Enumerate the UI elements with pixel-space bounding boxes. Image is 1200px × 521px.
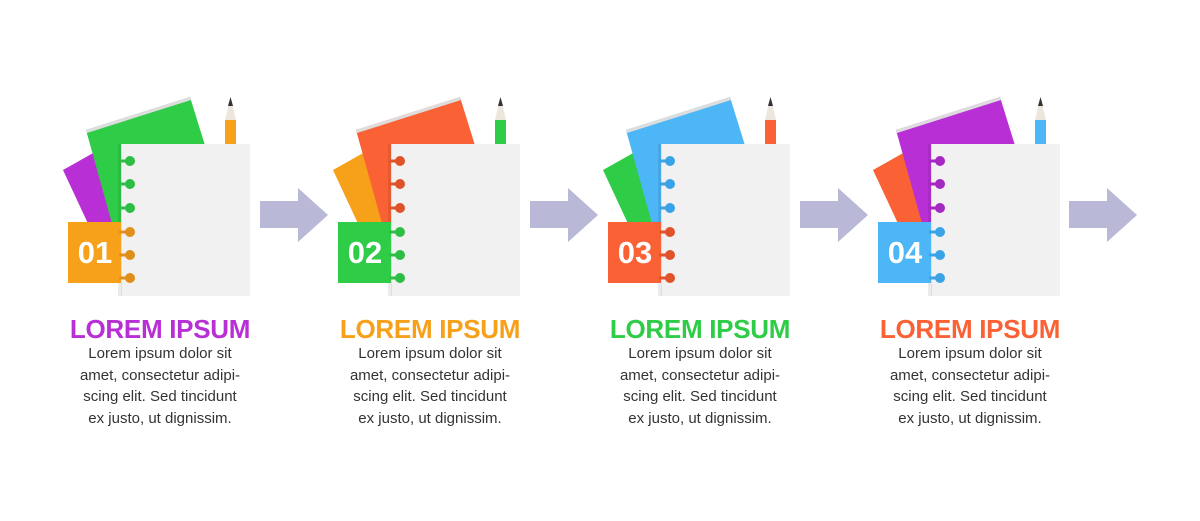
text 4: amet, consectetur adipi- [890,366,1050,384]
unit 1 illustration: 01 [78,235,112,270]
unit 2 illustration [333,97,520,296]
arrow 2 [530,188,598,242]
text 3: amet, consectetur adipi- [620,366,780,384]
text 3: scing elit. Sed tincidunt [623,388,777,405]
arrow 4 [1069,188,1137,242]
unit 4 illustration: 04 [888,235,923,270]
heading 3: LOREM IPSUM [610,314,790,344]
text 4 [890,345,1050,426]
heading 1: LOREM IPSUM [70,314,250,344]
text 4: Lorem ipsum dolor sit [898,345,1042,362]
text 1: scing elit. Sed tincidunt [83,388,237,405]
text 2: amet, consectetur adipi- [350,366,510,384]
arrow 3 [800,188,868,242]
unit 4 illustration [873,97,1060,296]
text 4: scing elit. Sed tincidunt [893,388,1047,405]
text 1: amet, consectetur adipi- [80,366,240,384]
text 2: scing elit. Sed tincidunt [353,388,507,405]
text 4: ex justo, ut dignissim. [898,410,1042,426]
text 1: Lorem ipsum dolor sit [88,345,232,362]
heading 2: LOREM IPSUM [340,314,520,344]
arrow 1 [260,188,328,242]
text 2: ex justo, ut dignissim. [358,410,502,426]
text 3: Lorem ipsum dolor sit [628,345,772,362]
text 1 [80,345,240,426]
unit 1 illustration [63,97,250,296]
unit 3 illustration: 03 [618,235,652,270]
heading 4: LOREM IPSUM [880,314,1060,344]
text 2: Lorem ipsum dolor sit [358,345,502,362]
text 2 [350,345,510,426]
text 1: ex justo, ut dignissim. [88,410,232,426]
text 3: ex justo, ut dignissim. [628,410,772,426]
text 3 [620,345,780,426]
unit 3 illustration [603,97,790,296]
unit 2 illustration: 02 [348,235,382,270]
